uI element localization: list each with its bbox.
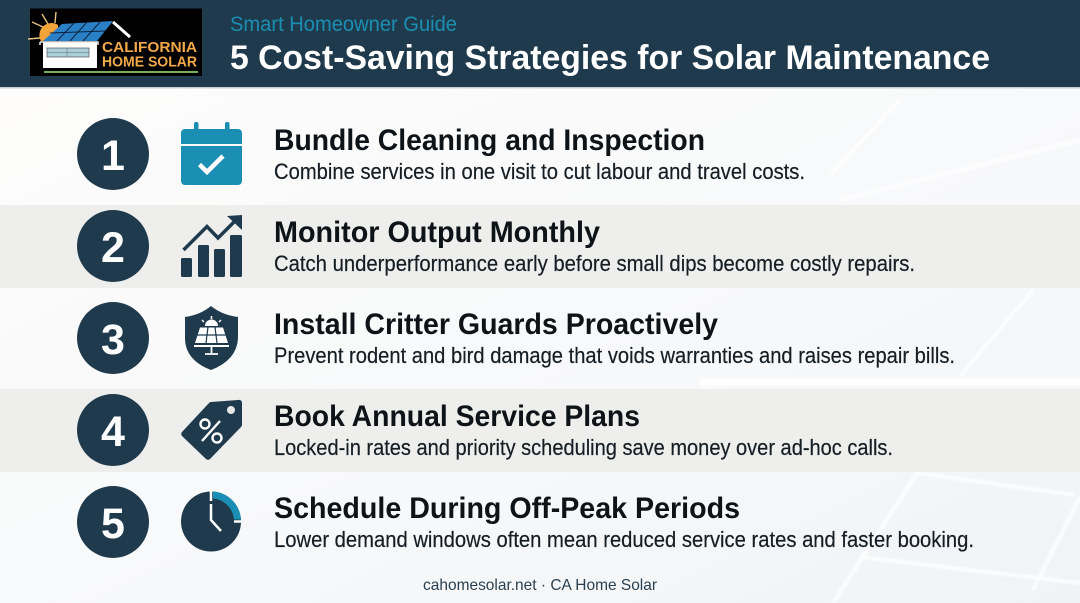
number badge 2: [77, 210, 149, 282]
heading 2: Monitor Output Monthly: [274, 216, 601, 249]
logo: [28, 8, 202, 76]
number badge 2: 2: [101, 224, 125, 272]
icon: clock with highlighted segment: [181, 490, 242, 552]
description 1: Combine services in one visit to cut labour and travel costs.: [274, 159, 805, 184]
number badge 5: [77, 486, 149, 558]
heading 1: Bundle Cleaning and Inspection: [274, 124, 705, 157]
number badge 1: 1: [101, 132, 125, 180]
logo: HOME SOLAR: [102, 54, 198, 70]
icon: rising bar chart: [181, 215, 242, 277]
row band 2: [0, 205, 1080, 288]
description 5: Lower demand windows often mean reduced service rates and faster booking.: [274, 527, 974, 552]
header bar: [0, 0, 1080, 88]
number badge 1: [77, 118, 149, 190]
number badge 3: 3: [101, 316, 125, 364]
heading 3: Install Critter Guards Proactively: [274, 308, 719, 341]
number badge 4: 4: [101, 408, 125, 456]
icon: percent price tag: [181, 400, 242, 460]
icon: calendar with check: [181, 122, 242, 185]
number badge 4: [77, 394, 149, 466]
row band 4: [0, 389, 1080, 472]
icon: shield with solar panel: [185, 306, 238, 370]
heading 5: Schedule During Off-Peak Periods: [274, 492, 740, 525]
footer: cahomesolar.net · CA Home Solar: [423, 577, 658, 594]
subtitle: Smart Homeowner Guide: [230, 13, 457, 36]
description 4: Locked-in rates and priority scheduling save money over ad-hoc calls.: [274, 435, 893, 460]
number badge 3: [77, 302, 149, 374]
title: 5 Cost-Saving Strategies for Solar Maintenance: [230, 39, 990, 77]
row 3: install critter guards proactively: [77, 302, 955, 374]
description 2: Catch underperformance early before small dips become costly repairs.: [274, 251, 915, 276]
description 3: Prevent rodent and bird damage that voids warranties and raises repair bills.: [274, 343, 955, 368]
row 2: monitor output monthly: [0, 205, 1080, 288]
heading 4: Book Annual Service Plans: [274, 400, 640, 433]
row 4: book annual service plans: [0, 389, 1080, 472]
logo: CALIFORNIA: [102, 40, 198, 56]
row 1: bundle cleaning and inspection: [77, 118, 805, 190]
number badge 5: 5: [101, 500, 125, 548]
row 5: schedule during off-peak periods: [77, 486, 974, 558]
